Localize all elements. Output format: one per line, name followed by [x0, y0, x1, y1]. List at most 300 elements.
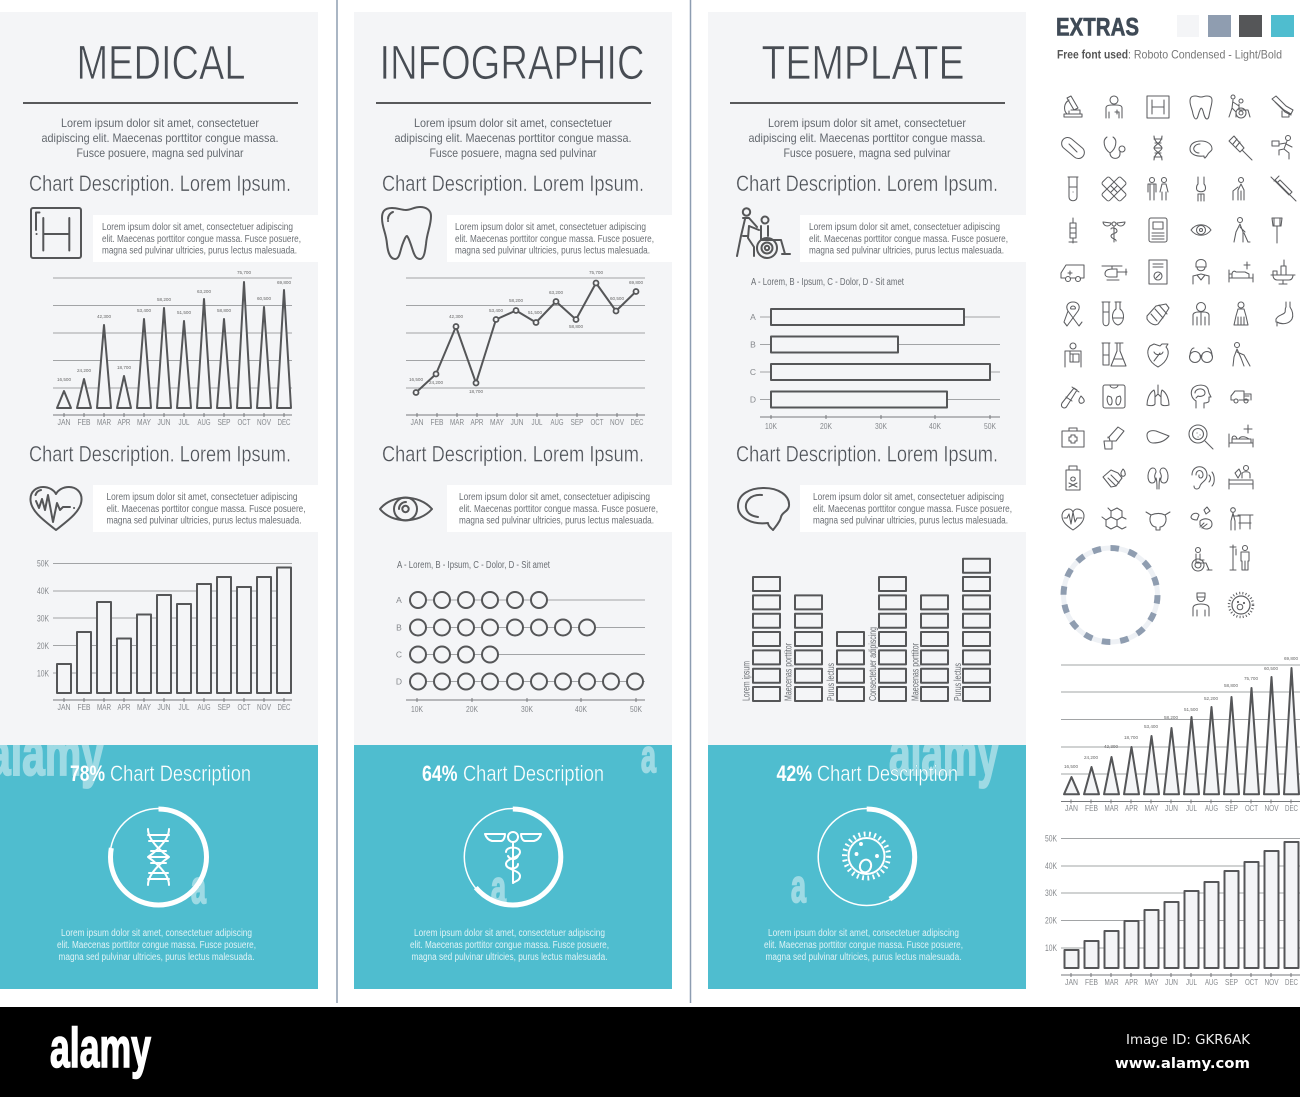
- chart: line by month: 51,500: [528, 310, 542, 315]
- intro text: Lorem ipsum dolor sit amet, consectetuer: [414, 116, 612, 130]
- panel: template: [708, 12, 1026, 989]
- chart: rising triangles: 53,400: [1144, 724, 1158, 729]
- alamy logo: alamy: [50, 1016, 151, 1079]
- icon: hand washing: [1103, 469, 1125, 487]
- text box 2: Lorem ipsum dolor sit amet, consectetuer adipiscing: [813, 492, 1004, 503]
- icon: brain: [1190, 141, 1212, 158]
- chart: stacked blocks: Purus lectus: [826, 663, 837, 701]
- icon: caduceus: [1103, 222, 1125, 242]
- icon: head with brain: [1191, 385, 1211, 408]
- intro text: [42, 116, 278, 160]
- icon: person: [1193, 302, 1209, 325]
- chart: dot rows: C: [396, 650, 402, 660]
- chart: triangle peaks by month: NOV: [257, 417, 271, 427]
- icon: crutch: [1229, 136, 1252, 160]
- icon: ribbon: [1064, 302, 1082, 326]
- legend: A - Lorem, B - Ipsum, C - Dolor, D - Sit amet: [397, 560, 550, 571]
- icon: old person with cane: [1233, 178, 1244, 200]
- icon grid: [1059, 95, 1296, 617]
- intro text: adipiscing elit. Maecenas porttitor congue massa.: [748, 131, 986, 145]
- chart: rising bars: [1045, 834, 1300, 987]
- icon: stomach: [1276, 302, 1293, 326]
- icon: doctor: [1106, 96, 1122, 118]
- text box 1: magna sed pulvinar ultricies, purus lectus malesuada.: [455, 246, 650, 256]
- divider lines: [337, 0, 690, 1003]
- dashed ring: [1064, 548, 1158, 642]
- chart: rising triangles: 16,500: [1064, 764, 1078, 769]
- heading: 78% chart description: 78%: [70, 761, 105, 786]
- chart: line by month: MAY: [490, 417, 504, 427]
- chart: rising bars: 20K: [1045, 916, 1057, 926]
- chart: dot rows: D: [396, 676, 402, 686]
- text box 1: [93, 215, 318, 262]
- intro text: Lorem ipsum dolor sit amet, consectetuer: [61, 116, 259, 130]
- chart: line by month: APR: [470, 417, 484, 427]
- icon: dna: [148, 829, 169, 885]
- icon: dental chair: [1272, 96, 1293, 117]
- heading: chart description 1: Chart Description. Lorem Ipsum.: [29, 171, 291, 196]
- chart: line by month: SEP: [570, 417, 584, 427]
- chart: triangle peaks by month: 18,700: [117, 365, 131, 370]
- intro text: [394, 116, 632, 160]
- icon: weight scale: [1103, 385, 1125, 408]
- panel: infographic: [354, 12, 672, 989]
- chart: monthly bars: FEB: [78, 702, 91, 712]
- chart: monthly bars: 50K: [37, 558, 49, 568]
- chart: rising bars: FEB: [1085, 977, 1098, 987]
- icon: blind man: [1233, 342, 1250, 366]
- chart: triangle peaks by month: JUL: [178, 417, 190, 427]
- icon: stretcher: [1231, 508, 1253, 530]
- chart: line by month: DEC: [630, 417, 644, 427]
- icon: anatomical heart: [1148, 344, 1168, 367]
- chart: rising triangles: JUL: [1186, 803, 1197, 813]
- icon: ambulance: [1061, 265, 1084, 282]
- chart: horizontal bars: 20K: [820, 421, 832, 431]
- teal text: magna sed pulvinar ultricies, purus lectus malesuada.: [412, 952, 608, 963]
- chart: monthly bars: JAN: [58, 702, 70, 712]
- icon: two persons: [1148, 178, 1168, 200]
- chart: line by month: NOV: [610, 417, 624, 427]
- icon: xray person: [1065, 343, 1081, 367]
- chart: line by month: FEB: [430, 417, 444, 427]
- chart: line by month: 75,700: [589, 270, 603, 275]
- chart: monthly bars: 20K: [37, 641, 49, 651]
- icon: syringe diagonal: [1271, 176, 1296, 201]
- text box 2: [447, 485, 672, 532]
- colour swatches: [1177, 15, 1294, 37]
- chart: dot rows: [396, 592, 645, 714]
- icon: person gown: [1234, 302, 1248, 325]
- icon: poison bottle: [1066, 466, 1080, 490]
- chart: triangle peaks by month: 58,800: [217, 308, 231, 313]
- icon: running medic: [1272, 136, 1292, 159]
- chart: line by month: 53,400: [489, 308, 503, 313]
- teal text: elit. Maecenas porttitor congue massa. Fusce posuere,: [410, 940, 609, 951]
- chart: dot rows: 50K: [630, 704, 642, 714]
- font note: Free font used: [1057, 48, 1128, 62]
- text box 1: elit. Maecenas porttitor congue massa. Fusce posuere,: [102, 234, 301, 245]
- title: medical: MEDICAL: [76, 37, 246, 90]
- chart: line by month: JUL: [532, 417, 543, 427]
- chart: dot rows: A: [396, 595, 402, 605]
- chart: monthly bars: 30K: [37, 614, 49, 624]
- icon: crutch vertical: [1272, 218, 1282, 243]
- chart: line by month: 58,200: [509, 298, 523, 303]
- icon: syringe vertical: [1069, 218, 1077, 243]
- chart: triangle peaks by month: DEC: [278, 417, 290, 427]
- chart: stacked blocks: Maecenas porttitor: [784, 643, 794, 701]
- chart: triangle peaks by month: 16,500: [57, 377, 71, 382]
- chart: triangle peaks by month: 58,200: [157, 297, 171, 302]
- chart: dot rows: 10K: [411, 704, 423, 714]
- icon: nurse bust: [1193, 593, 1209, 616]
- chart: line by month: MAR: [450, 417, 464, 427]
- chart: rising triangles: MAR: [1104, 803, 1118, 813]
- text box 2: Lorem ipsum dolor sit amet, consectetuer adipiscing: [459, 492, 650, 503]
- text box 2: elit. Maecenas porttitor congue massa. Fusce posuere,: [106, 504, 306, 515]
- chart: stacked blocks: Purus lectus: [953, 663, 964, 701]
- icon: lungs: [1147, 385, 1169, 406]
- chart: horizontal bars: B: [750, 340, 756, 350]
- chart: triangle peaks by month: OCT: [238, 417, 250, 427]
- watermark: alamy: [889, 720, 999, 789]
- teal text: [410, 928, 609, 963]
- footer bar: [0, 1007, 1300, 1097]
- chart: line by month: 18,700: [469, 389, 483, 394]
- chart: line by month: JAN: [410, 417, 424, 427]
- legend: A - Lorem, B - Ipsum, C - Dolor, D - Sit amet: [751, 277, 904, 288]
- text box 1: elit. Maecenas porttitor congue massa. Fusce posuere,: [455, 234, 654, 245]
- text box 2: magna sed pulvinar ultricies, purus lectus malesuada.: [106, 516, 302, 526]
- icon: tube and flask: [1102, 302, 1124, 326]
- font note: : Roboto Condensed - Light/Bold: [1128, 48, 1282, 62]
- donut: 78%: [110, 808, 207, 906]
- chart: triangle peaks by month: MAY: [137, 417, 151, 427]
- chart: stacked blocks: Lorem ipsum: [742, 661, 752, 701]
- teal section: 78%: [0, 720, 318, 989]
- icon: helicopter: [1102, 266, 1127, 280]
- icon: iv stand person: [1230, 545, 1249, 570]
- chart: monthly bars: MAR: [97, 702, 111, 712]
- chart: rising triangles: NOV: [1264, 803, 1279, 813]
- chart: triangle peaks by month: 75,700: [237, 270, 251, 275]
- chart: line by month: JUN: [510, 417, 524, 427]
- icon: walker: [1234, 218, 1250, 242]
- icon: pills in hand: [1191, 507, 1212, 529]
- chart: horizontal bars: 30K: [875, 421, 887, 431]
- chart: rising triangles: AUG: [1205, 803, 1218, 813]
- icon: bed with cross: [1229, 262, 1253, 282]
- heading: 64% chart description: Chart Description: [463, 761, 604, 786]
- chart: triangle peaks by month: MAR: [97, 417, 111, 427]
- chart: rising bars: 40K: [1045, 861, 1057, 871]
- chart: triangle peaks by month: 63,200: [197, 289, 211, 294]
- title: infographic: INFOGRAPHIC: [380, 37, 644, 90]
- heading: chart description 2: Chart Description. Lorem Ipsum.: [736, 442, 998, 466]
- teal text: elit. Maecenas porttitor congue massa. Fusce posuere,: [57, 940, 256, 951]
- teal text: [57, 928, 256, 963]
- title: template: TEMPLATE: [762, 37, 964, 90]
- chart: rising bars: AUG: [1205, 977, 1218, 987]
- chart: rising bars: JUN: [1165, 977, 1178, 987]
- chart: dot rows: B: [396, 622, 402, 632]
- chart: rising triangles: 58,200: [1164, 715, 1178, 720]
- icon: bed with plus: [1229, 425, 1253, 447]
- icon: wheelchair and helper: [1229, 95, 1250, 118]
- icon: surgery table: [1271, 260, 1295, 284]
- panel: medical: [0, 12, 318, 989]
- teal text: magna sed pulvinar ultricies, purus lectus malesuada.: [766, 952, 962, 963]
- chart: line by month: OCT: [590, 417, 604, 427]
- icon: dna: [1154, 136, 1162, 160]
- icon: eye: [380, 498, 432, 520]
- watermark a: a: [791, 860, 806, 912]
- icon: pill: [1059, 135, 1087, 161]
- teal text: [764, 928, 963, 963]
- heading: chart description 1: Chart Description. Lorem Ipsum.: [382, 171, 644, 196]
- heading: chart description 2: Chart Description. Lorem Ipsum.: [29, 442, 291, 466]
- text box 1: magna sed pulvinar ultricies, purus lectus malesuada.: [102, 246, 297, 256]
- chart: rising triangles: APR: [1125, 803, 1138, 813]
- text box 1: Lorem ipsum dolor sit amet, consectetuer adipiscing: [455, 222, 646, 233]
- chart: dot rows: 20K: [466, 704, 478, 714]
- chart: monthly bars: 40K: [37, 586, 49, 596]
- chart: horizontal bars: A: [750, 312, 756, 322]
- chart: rising triangles: 24,200: [1084, 755, 1098, 760]
- font note: [1057, 48, 1282, 62]
- chart: rising bars: JAN: [1065, 977, 1078, 987]
- chart: monthly bars: OCT: [238, 702, 250, 712]
- chart: rising bars: APR: [1125, 977, 1138, 987]
- text box 1: Lorem ipsum dolor sit amet, consectetuer adipiscing: [809, 222, 1000, 233]
- icon: heart ecg: [1062, 509, 1084, 530]
- chart: line by month: 63,200: [549, 290, 563, 295]
- chart: line by month: 16,500: [409, 377, 423, 382]
- chart: line by month: 60,500: [610, 296, 624, 301]
- chart: monthly bars: JUN: [158, 702, 170, 712]
- chart: horizontal bars: C: [750, 367, 756, 377]
- chart: triangle peaks by month: AUG: [198, 417, 210, 427]
- chart: monthly bars: NOV: [257, 702, 271, 712]
- icon: heart with pulse: [30, 487, 82, 530]
- heading: extras: EXTRAS: [1056, 14, 1139, 42]
- chart: rising triangles: [1061, 656, 1300, 813]
- icon: tooth: [1190, 96, 1212, 119]
- icon: glove hands: [1147, 304, 1169, 325]
- chart: dot rows: 30K: [521, 704, 533, 714]
- chart: triangle peaks by month: FEB: [78, 417, 91, 427]
- chart: triangle peaks by month: 69,800: [277, 280, 291, 285]
- icon: hospital sign: [1147, 96, 1169, 118]
- image id: Image ID: GKR6AK: [1126, 1033, 1250, 1048]
- extras column: [1045, 14, 1300, 987]
- icon: test tube: [1068, 177, 1078, 201]
- chart: monthly bars: APR: [118, 702, 130, 712]
- chart: rising bars: MAR: [1104, 977, 1118, 987]
- icon: tooth: [382, 207, 431, 259]
- heading: 42% chart description: [776, 761, 958, 786]
- icon: bandage cross: [1101, 176, 1127, 202]
- text box 2: elit. Maecenas porttitor congue massa. Fusce posuere,: [459, 504, 658, 515]
- icon: magnifier: [1189, 425, 1213, 449]
- icon: patient treatment: [1229, 466, 1253, 489]
- chart: horizontal bars: 50K: [984, 421, 996, 431]
- chart: rising triangles: 69,800: [1284, 656, 1298, 661]
- chart: rising bars: MAY: [1144, 977, 1159, 987]
- icon: bacterium small: [1229, 593, 1253, 617]
- chart: monthly bars: MAY: [137, 702, 151, 712]
- teal text: Lorem ipsum dolor sit amet, consectetuer adipiscing: [61, 928, 252, 939]
- chart: horizontal bars: [750, 309, 1000, 431]
- icon: brain: [738, 488, 789, 530]
- teal text: Lorem ipsum dolor sit amet, consectetuer adipiscing: [414, 928, 605, 939]
- teal text: Lorem ipsum dolor sit amet, consectetuer adipiscing: [768, 928, 959, 939]
- donut: 42%: [818, 808, 915, 906]
- teal section: 42%: [708, 720, 1026, 989]
- text box 1: [447, 215, 672, 262]
- teal text: elit. Maecenas porttitor congue massa. Fusce posuere,: [764, 940, 963, 951]
- chart: monthly bars: AUG: [198, 702, 210, 712]
- chart: line by month: 69,800: [629, 280, 643, 285]
- chart: rising bars: 30K: [1045, 888, 1057, 898]
- chart: stacked blocks: Maecenas porttitor: [910, 643, 922, 701]
- chart: rising triangles: 51,500: [1184, 707, 1198, 712]
- chart: triangle peaks by month: APR: [118, 417, 130, 427]
- icon: stethoscope: [1104, 137, 1125, 158]
- text box 2: Lorem ipsum dolor sit amet, consectetuer adipiscing: [106, 492, 298, 503]
- text box 2: [800, 485, 1026, 532]
- chart: rising triangles: FEB: [1085, 803, 1098, 813]
- icon: knee joint: [1196, 177, 1206, 201]
- chart: triangle peaks by month: [53, 270, 292, 427]
- chart: triangle peaks by month: 51,500: [177, 310, 191, 315]
- heading: chart description 2: Chart Description. Lorem Ipsum.: [382, 442, 644, 466]
- text box 2: magna sed pulvinar ultricies, purus lectus malesuada.: [459, 516, 654, 526]
- icon: ear: [1192, 467, 1214, 489]
- chart: line by month: 24,200: [429, 380, 443, 385]
- chart: line by month: AUG: [550, 417, 564, 427]
- intro text: adipiscing elit. Maecenas porttitor congue massa.: [42, 131, 278, 145]
- teal section: 64%: [354, 730, 672, 989]
- text box 1: [800, 215, 1026, 262]
- icon: nurse: [1193, 260, 1209, 284]
- chart: triangle peaks by month: 53,400: [137, 308, 151, 313]
- heading: 78% chart description: [70, 761, 251, 786]
- chart: rising triangles: JUN: [1165, 803, 1178, 813]
- chart: rising bars: 50K: [1045, 834, 1057, 844]
- intro text: Fusce posuere, magna sed pulvinar: [784, 146, 950, 160]
- chart: stacked blocks: Consectetuer adipiscing: [868, 627, 879, 701]
- chart: triangle peaks by month: SEP: [218, 417, 231, 427]
- watermark a: a: [191, 861, 206, 913]
- text box 2: magna sed pulvinar ultricies, purus lectus malesuada.: [813, 516, 1008, 526]
- icon: caduceus: [485, 832, 541, 883]
- intro text: [748, 116, 986, 160]
- text box 1: Lorem ipsum dolor sit amet, consectetuer adipiscing: [102, 222, 293, 233]
- icon: molecule: [1102, 508, 1126, 529]
- chart: rising bars: JUL: [1186, 977, 1197, 987]
- chart: rising triangles: OCT: [1245, 803, 1258, 813]
- chart: rising triangles: MAY: [1144, 803, 1159, 813]
- icon: tube and flask 2: [1102, 343, 1126, 366]
- icon: wheelchair person: [1192, 548, 1212, 571]
- donut: 64%: [464, 808, 561, 906]
- icon: bacterium: [844, 834, 888, 878]
- chart: triangle peaks by month: 60,500: [257, 296, 271, 301]
- icon: first aid kit: [1062, 428, 1084, 447]
- intro text: Lorem ipsum dolor sit amet, consectetuer: [768, 116, 966, 130]
- chart: triangle peaks by month: JAN: [58, 417, 70, 427]
- icon: wheelchair with helper: [737, 208, 790, 258]
- icon: hospital sign: [31, 208, 81, 258]
- chart: rising bars: OCT: [1245, 977, 1258, 987]
- heading: chart description 1: Chart Description. Lorem Ipsum.: [736, 171, 998, 196]
- chart: triangle peaks by month: JUN: [158, 417, 170, 427]
- icon: bladder: [1146, 512, 1170, 530]
- chart: rising triangles: 60,500: [1264, 666, 1278, 671]
- heading: 78% chart description: Chart Description: [110, 761, 251, 786]
- chart: monthly bars: SEP: [218, 702, 231, 712]
- text box 1: magna sed pulvinar ultricies, purus lectus malesuada.: [809, 246, 1004, 256]
- chart: monthly bars: [37, 558, 292, 712]
- heading: 42% chart description: 42%: [776, 761, 812, 786]
- chart: monthly bars: 10K: [37, 668, 49, 678]
- chart: horizontal bars: 40K: [929, 421, 941, 431]
- chart: rising triangles: 58,800: [1224, 683, 1238, 688]
- icon: microscope: [1064, 96, 1082, 117]
- heading: 42% chart description: Chart Description: [817, 761, 958, 786]
- chart: horizontal bars: D: [750, 394, 756, 404]
- chart: triangle peaks by month: 42,300: [97, 314, 111, 319]
- icon: glasses: [1190, 348, 1212, 362]
- intro text: Fusce posuere, magna sed pulvinar: [76, 146, 244, 160]
- chart: monthly bars: JUL: [178, 702, 190, 712]
- icon: kidneys: [1148, 468, 1168, 489]
- chart: monthly bars: DEC: [278, 702, 290, 712]
- chart: horizontal bars: 10K: [765, 421, 777, 431]
- site url: www.alamy.com: [1115, 1056, 1250, 1072]
- chart: rising bars: 10K: [1045, 943, 1057, 953]
- text box 1: elit. Maecenas porttitor congue massa. Fusce posuere,: [809, 234, 1008, 245]
- chart: rising triangles: 42,300: [1104, 744, 1118, 749]
- chart: rising triangles: JAN: [1065, 803, 1078, 813]
- chart: dot rows: 40K: [575, 704, 587, 714]
- chart: rising bars: SEP: [1225, 977, 1238, 987]
- intro text: Fusce posuere, magna sed pulvinar: [430, 146, 596, 160]
- icon: ambulance small: [1231, 391, 1251, 403]
- chart: rising triangles: SEP: [1225, 803, 1238, 813]
- chart: line by month: [406, 270, 645, 427]
- chart: stacked blocks: [742, 559, 990, 701]
- icon: tube with drop: [1061, 387, 1084, 408]
- chart: rising bars: NOV: [1264, 977, 1279, 987]
- chart: line by month: 58,800: [569, 324, 583, 329]
- watermark a: a: [641, 730, 656, 782]
- watermark a: a: [491, 861, 506, 913]
- icon: pouring bottle: [1104, 427, 1124, 449]
- heading: 64% chart description: 64%: [422, 761, 458, 786]
- chart: line by month: 42,300: [449, 314, 463, 319]
- teal text: magna sed pulvinar ultricies, purus lectus malesuada.: [58, 952, 254, 963]
- icon: eye: [1191, 225, 1211, 235]
- heading: 64% chart description: [422, 761, 604, 786]
- chart: rising triangles: 75,700: [1244, 676, 1258, 681]
- icon: liver: [1147, 431, 1169, 443]
- text box 2: [93, 485, 318, 532]
- chart: rising triangles: 18,700: [1124, 735, 1138, 740]
- chart: triangle peaks by month: 24,200: [77, 368, 91, 373]
